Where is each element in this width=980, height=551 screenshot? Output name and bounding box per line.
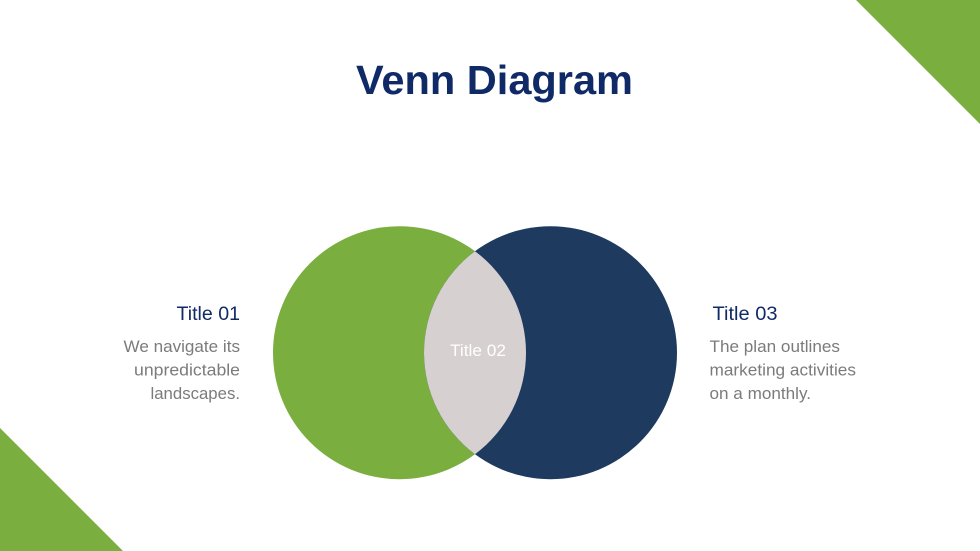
description: left: We navigate its [124,337,240,356]
right text block [710,304,856,403]
description: left [124,337,240,403]
heading: Title 03: Title 03 [712,304,778,325]
description: left: unpredictable [134,360,240,380]
circle: left green [273,226,526,479]
circle: right navy [424,226,677,479]
label: Title 02: Title 02 [450,342,506,360]
corner triangle: bottom left [0,428,123,551]
title: Venn Diagram [356,57,633,103]
venn diagram [273,226,677,479]
corner triangle: top right [856,0,980,124]
description: right: The plan outlines [710,337,840,356]
description: left: landscapes. [150,384,240,403]
description: right: marketing activities [710,360,856,380]
left text block [124,304,240,403]
heading: Title 01: Title 01 [176,304,240,325]
description: right [710,337,856,403]
description: right: on a monthly. [710,384,811,403]
overlap: lens [424,251,526,454]
